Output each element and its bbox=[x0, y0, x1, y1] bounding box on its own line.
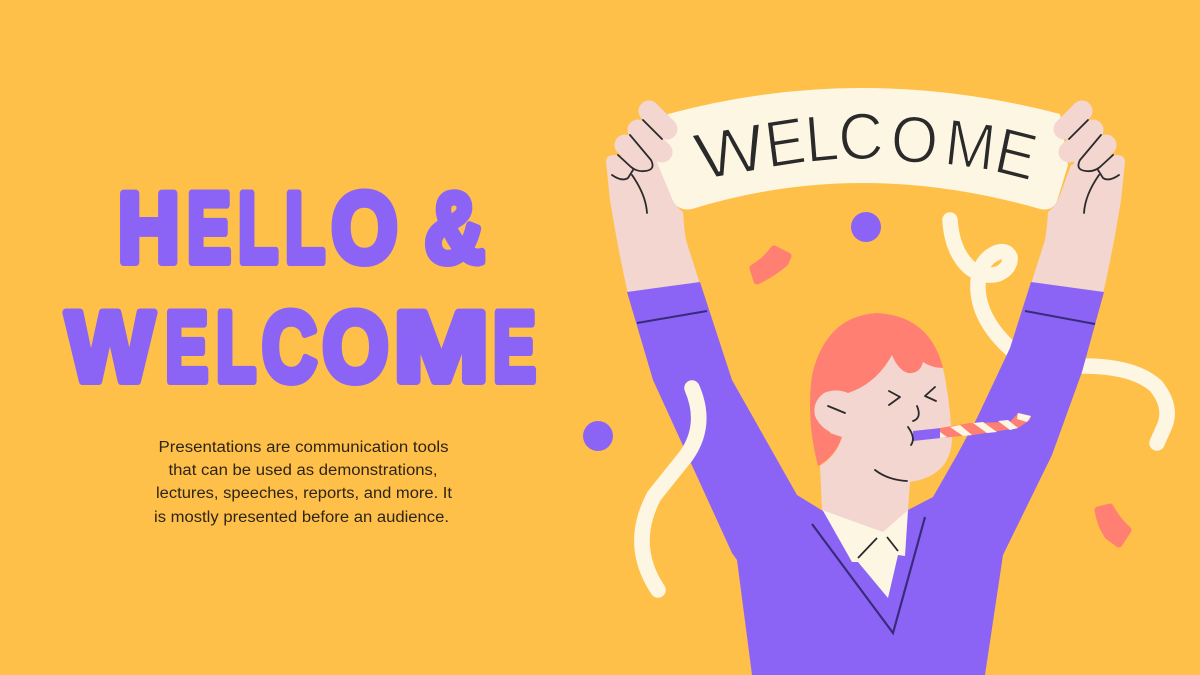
banner text: E bbox=[989, 113, 1044, 194]
title: & bbox=[425, 172, 485, 283]
welcome banner bbox=[656, 88, 1068, 210]
title bbox=[66, 172, 536, 402]
body text: Presentations are communication tools bbox=[158, 439, 449, 456]
ear bbox=[814, 390, 860, 436]
title: O bbox=[332, 172, 398, 283]
party blower bbox=[913, 413, 1031, 441]
body text: lectures, speeches, reports, and more. It bbox=[156, 485, 453, 502]
title: M bbox=[394, 291, 489, 402]
banner text: M bbox=[941, 104, 1000, 184]
face and neck bbox=[820, 355, 952, 532]
left arm and fist bbox=[606, 155, 700, 294]
banner text: W bbox=[690, 108, 773, 194]
confetti: coral piece right bbox=[1098, 507, 1128, 544]
body text bbox=[154, 439, 453, 526]
body text: that can be used as demonstrations, bbox=[168, 462, 438, 479]
right arm and fist bbox=[1031, 155, 1125, 294]
confetti: purple dot left bbox=[583, 421, 613, 451]
left fingers bbox=[612, 111, 667, 213]
eyes bbox=[889, 387, 936, 405]
confetti: coral piece top bbox=[753, 249, 788, 281]
back hair bbox=[810, 313, 943, 466]
title: L bbox=[216, 291, 256, 402]
title: C bbox=[262, 291, 317, 402]
person bbox=[606, 155, 1125, 675]
collar lines bbox=[858, 537, 898, 558]
streamer: left bbox=[642, 388, 699, 590]
mouth line bbox=[908, 427, 913, 445]
title: L bbox=[238, 172, 278, 283]
streamer: right bbox=[950, 220, 1167, 443]
title: E bbox=[165, 291, 208, 402]
title: E bbox=[493, 291, 536, 402]
title: E bbox=[187, 172, 231, 283]
title: O bbox=[322, 291, 388, 402]
sleeve line left bbox=[637, 311, 707, 323]
body text: is mostly presented before an audience. bbox=[154, 509, 449, 526]
purple sweater bbox=[627, 282, 1104, 675]
ear line bbox=[828, 406, 845, 413]
title: H bbox=[118, 172, 180, 283]
sweater V neckline bbox=[812, 517, 925, 633]
banner text: E bbox=[760, 103, 810, 182]
nose bbox=[913, 406, 919, 421]
title: W bbox=[66, 291, 155, 402]
right fingers bbox=[1064, 111, 1119, 213]
title: L bbox=[285, 172, 325, 283]
sleeve line right bbox=[1025, 311, 1095, 324]
banner text: L bbox=[802, 100, 841, 176]
confetti: purple dot top bbox=[851, 212, 881, 242]
banner text: O bbox=[889, 101, 940, 177]
banner text: C bbox=[837, 98, 884, 174]
smile line bbox=[875, 470, 907, 481]
shirt collar bbox=[822, 509, 908, 598]
